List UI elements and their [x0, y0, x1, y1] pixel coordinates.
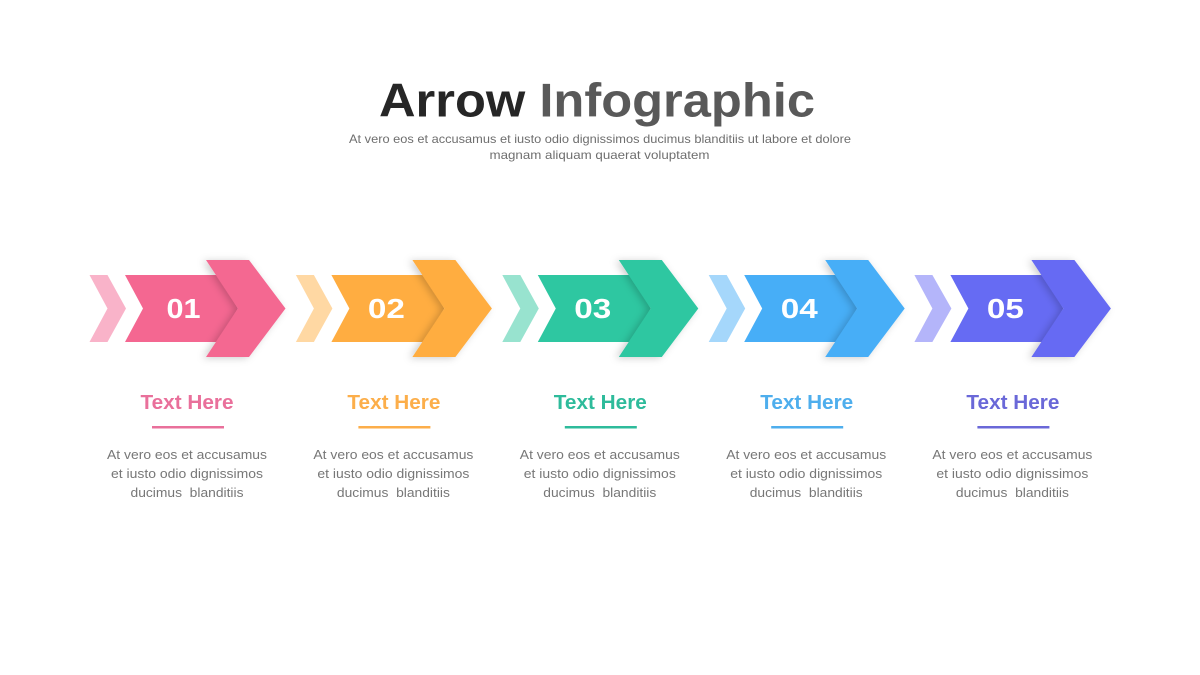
- step 3 small chevron: [502, 275, 539, 342]
- step 1 heading: Text Here: [140, 392, 234, 414]
- step 4 text: et iusto odio dignissimos: [730, 467, 882, 481]
- subtitle: At vero eos et accusamus et iusto odio dignissimos ducimus blanditiis ut labore et dolore: [349, 132, 851, 146]
- step 1 front arrow: [206, 260, 286, 357]
- step 2 underline: [358, 426, 430, 428]
- step 3 text: et iusto odio dignissimos: [524, 467, 676, 481]
- step 3 text: [520, 448, 680, 500]
- step 4 small chevron: [709, 275, 745, 342]
- step 4: [709, 260, 905, 500]
- step 1: [90, 260, 286, 500]
- subtitle: [349, 132, 851, 162]
- step 2 text: [313, 448, 473, 500]
- subtitle: magnam aliquam quaerat voluptatem: [490, 148, 710, 162]
- step 2 small chevron: [296, 275, 332, 342]
- step 5 text: et iusto odio dignissimos: [936, 467, 1088, 481]
- step 4 underline: [771, 426, 843, 428]
- step 3 number: 03: [574, 293, 611, 324]
- step 4 text: At vero eos et accusamus: [726, 448, 886, 462]
- step 2 front arrow: [412, 260, 492, 357]
- step 1 text: ducimus blanditiis: [130, 486, 244, 500]
- step 2 heading: Text Here: [347, 392, 440, 414]
- step 1 number: 01: [166, 293, 200, 324]
- step 1 small chevron: [90, 275, 126, 342]
- step 5 underline: [977, 426, 1049, 428]
- step 3 body arrow: [538, 275, 651, 342]
- step 2 number: 02: [368, 293, 405, 324]
- step 2 text: At vero eos et accusamus: [313, 448, 473, 462]
- step 5 text: ducimus blanditiis: [956, 486, 1069, 500]
- step 4 number: 04: [781, 293, 818, 324]
- step 5 text: [932, 448, 1092, 500]
- step 5 heading: Text Here: [966, 392, 1059, 414]
- title: Arrow Infographic: [379, 74, 815, 128]
- step 3 front arrow: [619, 260, 698, 357]
- step 2: [296, 260, 492, 500]
- step 3 text: ducimus blanditiis: [543, 486, 656, 500]
- step 5: [914, 260, 1111, 500]
- step 1 underline: [152, 426, 224, 428]
- step 5 text: At vero eos et accusamus: [932, 448, 1092, 462]
- step 3: [502, 260, 698, 500]
- step 1 text: et iusto odio dignissimos: [111, 467, 263, 481]
- step 5 small chevron: [914, 275, 951, 342]
- step 5 number: 05: [987, 293, 1024, 324]
- step 2 text: et iusto odio dignissimos: [317, 467, 469, 481]
- step 2 text: ducimus blanditiis: [337, 486, 450, 500]
- step 4 text: [726, 448, 886, 500]
- step 4 heading: Text Here: [760, 392, 853, 414]
- step 2 body arrow: [331, 275, 444, 342]
- step 1 text: At vero eos et accusamus: [107, 448, 267, 462]
- step 3 text: At vero eos et accusamus: [520, 448, 680, 462]
- step 4 text: ducimus blanditiis: [750, 486, 863, 500]
- step 4 front arrow: [825, 260, 905, 357]
- step 1 text: [107, 448, 267, 500]
- step 5 body arrow: [950, 275, 1063, 342]
- step 3 underline: [565, 426, 637, 428]
- step 5 front arrow: [1031, 260, 1111, 357]
- step 1 body arrow: [125, 275, 238, 342]
- step 4 body arrow: [744, 275, 857, 342]
- step 3 heading: Text Here: [554, 392, 647, 414]
